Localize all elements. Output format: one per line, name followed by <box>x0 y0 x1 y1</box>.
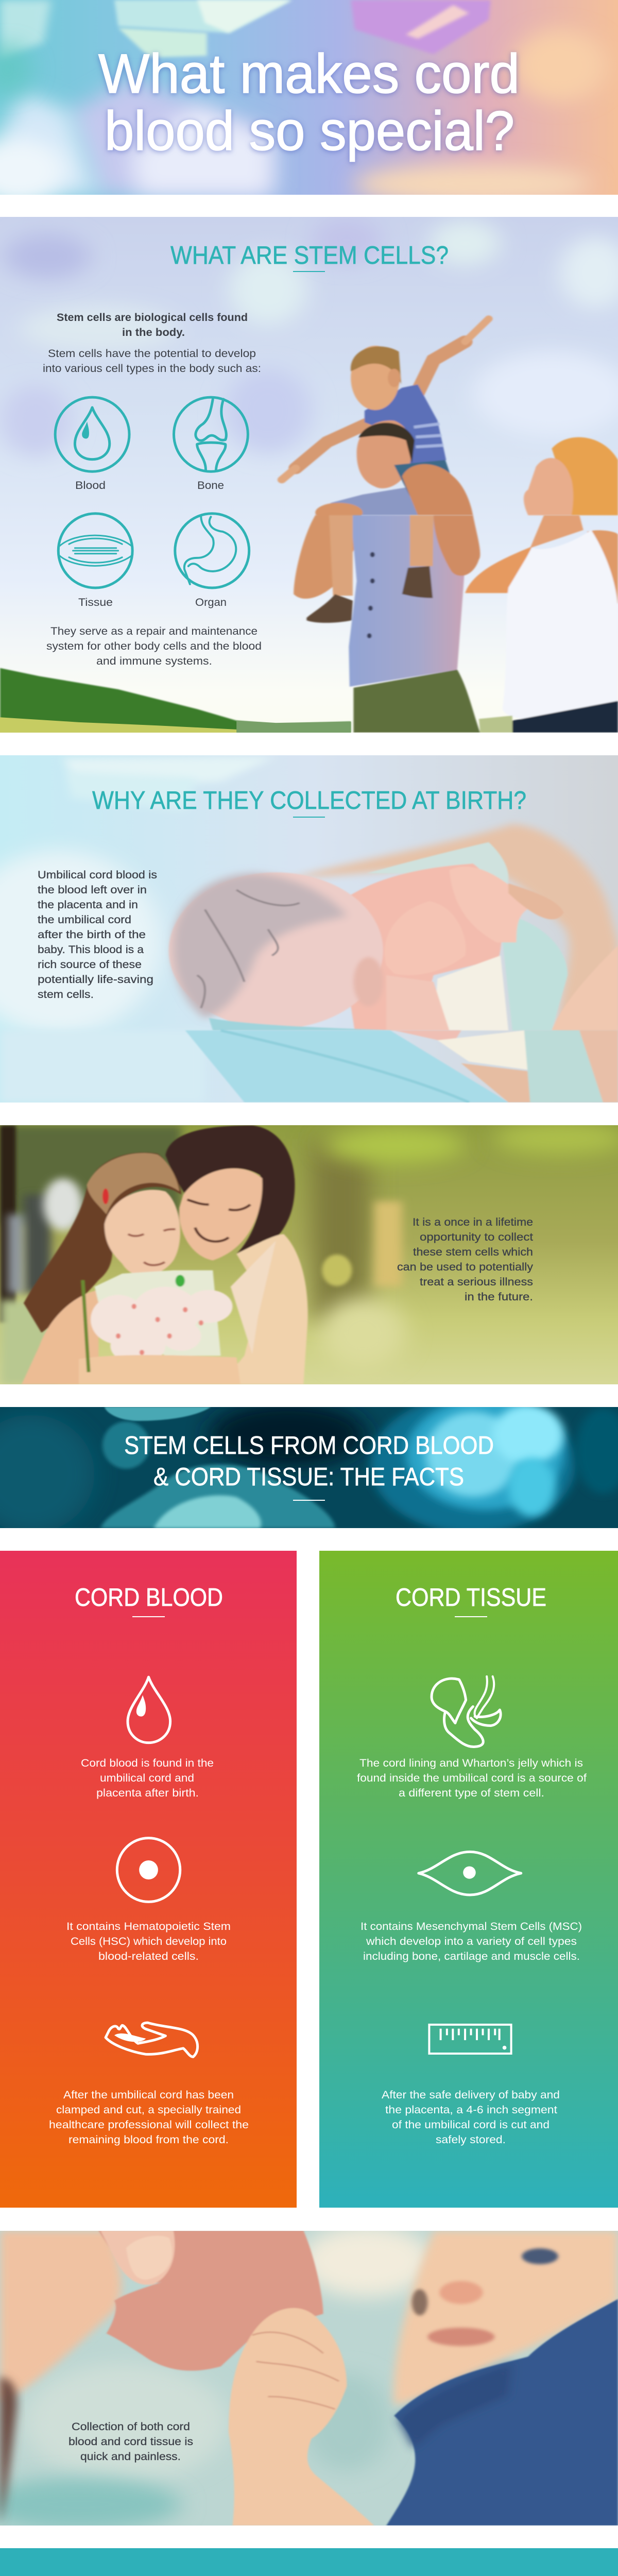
icon: fetus with cord <box>432 1676 501 1747</box>
text: once in a lifetime: opportunity to collect <box>420 1231 533 1243</box>
text: umbilical cord blood: after the birth of the <box>38 929 146 941</box>
text: stem cell intro: in the body. <box>122 327 185 338</box>
icon: organ stomach <box>175 514 249 588</box>
icon: drop <box>128 1677 170 1743</box>
text: clamped and cut: remaining blood from the cord. <box>68 2134 229 2146</box>
text: umbilical cord blood: potentially life-saving <box>38 974 153 986</box>
icon: tissue <box>58 514 132 588</box>
heading: cord tissue: CORD TISSUE <box>396 1584 546 1612</box>
panel: cord blood <box>0 1551 297 2208</box>
heading: what are stem cells: WHAT ARE STEM CELLS? <box>170 242 449 269</box>
text: safe delivery: of the umbilical cord is cut and <box>392 2119 550 2131</box>
panel: what are stem cells used for <box>0 2548 618 2576</box>
icon: hand <box>106 2023 198 2057</box>
heading: cord blood: CORD BLOOD <box>75 1584 223 1612</box>
text: umbilical cord blood <box>38 869 157 1001</box>
heading: why collected: WHY ARE THEY COLLECTED AT BIRTH? <box>92 787 526 815</box>
text: clamped and cut: After the umbilical cord has been <box>63 2089 234 2101</box>
text: stem cell intro: Stem cells have the potential to develop <box>48 348 256 360</box>
text: repair and maintenance: system for other body cells and the blood <box>46 640 262 652</box>
text: cord blood found: Cord blood is found in the <box>81 1757 214 1769</box>
heading: stem cells the facts: & CORD TISSUE: THE FACTS <box>153 1463 464 1491</box>
text: mesenchymal: It contains Mesenchymal Stem Cells (MSC) <box>360 1921 582 1933</box>
text: wharton's jelly: found inside the umbilical cord is a source of <box>357 1772 587 1784</box>
text: repair and maintenance: and immune systems. <box>96 655 212 667</box>
text: safe delivery: After the safe delivery of baby and <box>382 2089 560 2101</box>
text: quick and painless: quick and painless. <box>80 2451 181 2463</box>
text: once in a lifetime: can be used to potentially <box>397 1261 534 1273</box>
text: once in a lifetime: these stem cells which <box>413 1246 533 1258</box>
panel: cord tissue <box>319 1551 618 2208</box>
text: quick and painless: blood and cord tissue is <box>68 2436 193 2448</box>
text: safe delivery: safely stored. <box>436 2134 506 2146</box>
text: once in a lifetime: in the future. <box>465 1291 533 1303</box>
photo: mother and daughter <box>0 1123 618 1385</box>
photo: family with boy on shoulders <box>0 217 618 733</box>
text: wharton's jelly <box>357 1757 587 1799</box>
text: umbilical cord blood: Umbilical cord blood is <box>38 869 157 881</box>
text: safe delivery <box>382 2089 560 2146</box>
text: once in a lifetime <box>397 1216 534 1303</box>
text: hematopoietic: It contains Hematopoietic Stem <box>66 1921 231 1933</box>
text: clamped and cut <box>49 2089 249 2146</box>
text: umbilical cord blood: the umbilical cord <box>38 914 131 926</box>
text: clamped and cut: clamped and cut, a specially trained <box>56 2104 241 2116</box>
text: umbilical cord blood: rich source of these <box>38 959 142 971</box>
text: quick and painless <box>68 2421 193 2463</box>
text: cord blood found: umbilical cord and <box>100 1772 194 1784</box>
text: once in a lifetime: It is a once in a lifetime <box>413 1216 533 1228</box>
text: wharton's jelly: The cord lining and Wharton’s jelly which is <box>359 1757 583 1769</box>
panel: the facts banner <box>0 1407 618 1528</box>
label: blood: Blood <box>75 480 106 492</box>
text: umbilical cord blood: the placenta and in <box>38 899 138 911</box>
photo: baby hand holding finger <box>0 2225 618 2531</box>
panel: what are stem cells <box>0 217 618 733</box>
text: repair and maintenance <box>46 625 262 667</box>
heading: stem cells the facts <box>124 1432 494 1491</box>
title <box>98 42 520 162</box>
text: umbilical cord blood: the blood left over in <box>38 884 147 896</box>
panel: collection is painless <box>0 2231 618 2526</box>
text: mesenchymal: which develop into a variety of cell types <box>366 1936 577 1947</box>
text: cord blood found <box>81 1757 214 1799</box>
icon: ruler <box>429 2025 511 2054</box>
panel: why collected at birth <box>0 755 618 1103</box>
photo: newborn baby <box>0 757 618 1103</box>
heading: stem cells the facts: STEM CELLS FROM CORD BLOOD <box>124 1432 494 1460</box>
label: tissue: Tissue <box>78 597 113 608</box>
text: umbilical cord blood: stem cells. <box>38 989 94 1001</box>
text: cord blood found: placenta after birth. <box>96 1787 199 1799</box>
label: bone: Bone <box>197 480 224 492</box>
text: quick and painless: Collection of both cord <box>72 2421 190 2433</box>
text: hematopoietic: Cells (HSC) which develop into <box>71 1936 227 1947</box>
text: hematopoietic <box>66 1921 231 1962</box>
text: repair and maintenance: They serve as a repair and maintenance <box>50 625 258 637</box>
icon: bone joint <box>174 397 248 471</box>
text: umbilical cord blood: baby. This blood is a <box>38 944 144 956</box>
text: stem cell intro <box>43 312 261 375</box>
text: hematopoietic: blood-related cells. <box>98 1951 199 1962</box>
label: organ: Organ <box>195 597 227 608</box>
text: clamped and cut: healthcare professional will collect the <box>49 2119 249 2131</box>
icon: blood drop <box>55 397 129 471</box>
text: mesenchymal <box>360 1921 582 1962</box>
text: stem cell intro: Stem cells are biological cells found <box>57 312 248 324</box>
title: What makes cord <box>98 42 520 105</box>
text: mesenchymal: including bone, cartilage and muscle cells. <box>363 1951 580 1962</box>
text: wharton's jelly: a different type of stem cell. <box>399 1787 544 1799</box>
icon: stem cell <box>117 1838 180 1902</box>
text: safe delivery: the placenta, a 4-6 inch segment <box>385 2104 557 2116</box>
icon: mesenchymal cell <box>419 1852 521 1895</box>
panel: once in a lifetime <box>0 1125 618 1384</box>
text: once in a lifetime: treat a serious illness <box>420 1276 533 1288</box>
panel: hero header <box>0 0 618 195</box>
text: stem cell intro: into various cell types in the body such as: <box>43 363 261 375</box>
title: blood so special? <box>105 99 514 162</box>
photo: stem cell micrograph <box>0 1395 618 1533</box>
